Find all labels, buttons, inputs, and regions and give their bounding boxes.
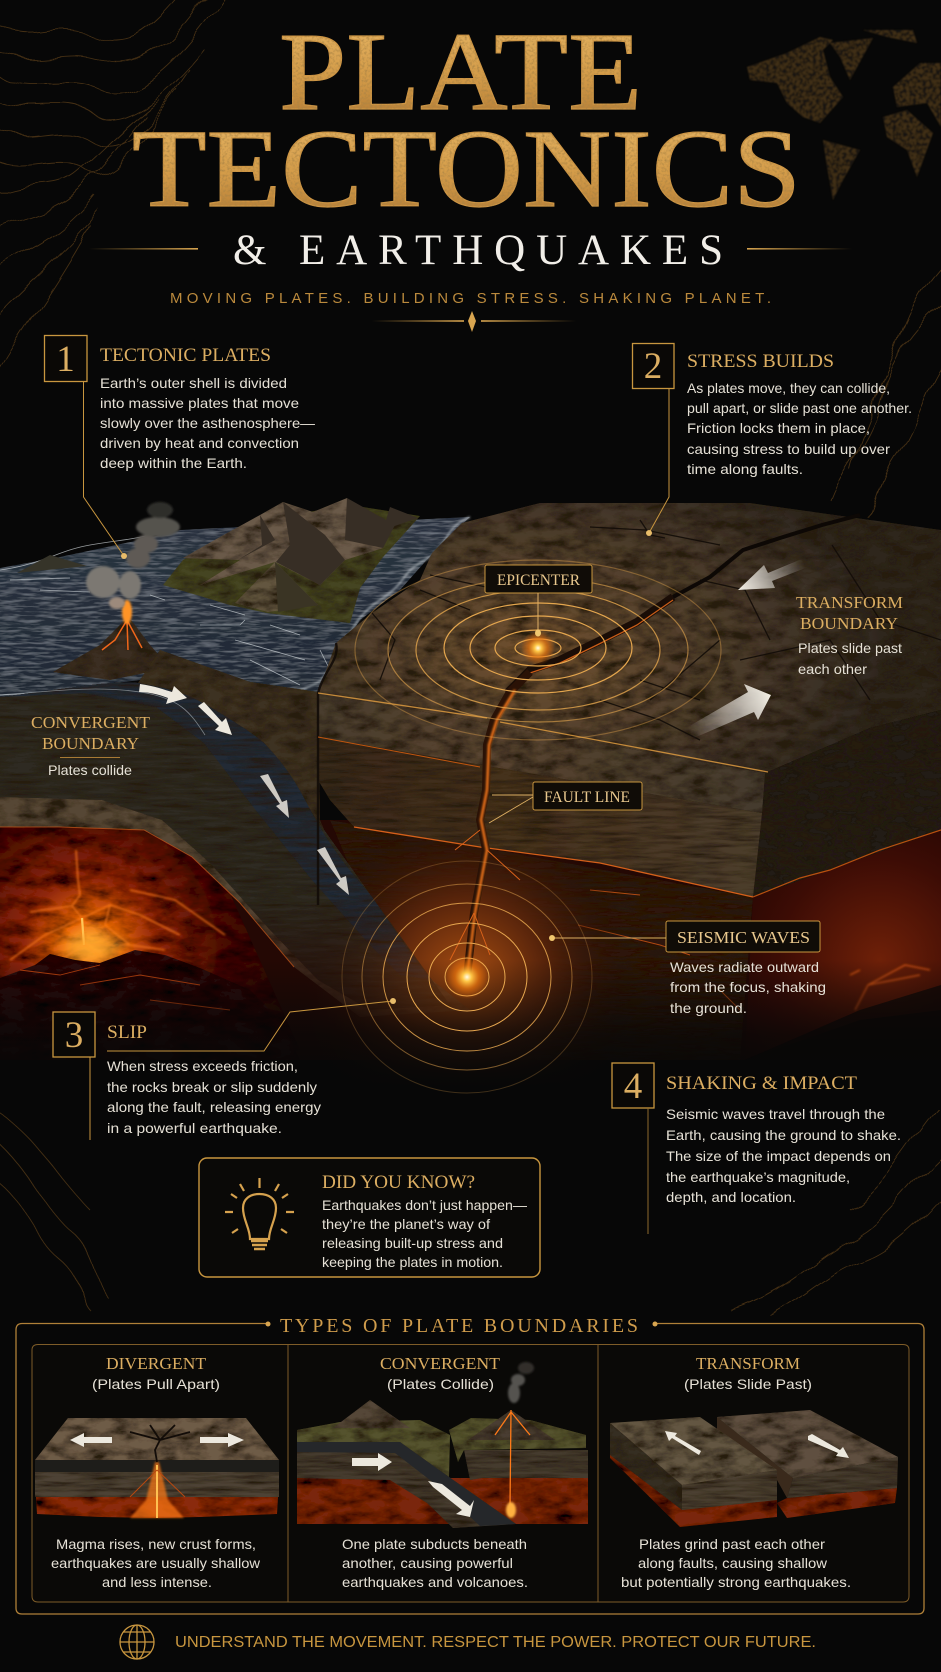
heading: TECTONIC PLATES [100,345,271,366]
heading: SHAKING & IMPACT [666,1073,857,1094]
mountains island [17,498,420,623]
subducting plate [0,682,470,1017]
description: earthquakes and volcanoes. [342,1574,528,1590]
body text [100,375,315,471]
arrows [70,1433,112,1447]
section heading: TYPES OF PLATE BOUNDARIES [280,1315,638,1337]
background contour lines [0,0,941,1315]
glow around focus [290,800,650,1100]
description: another, causing powerful [342,1555,513,1571]
block top surface [318,503,941,773]
epicenter seismic rings [355,560,721,740]
body text: Seismic waves travel through the [666,1106,885,1122]
description [342,1536,528,1590]
text: seismic waves description: from the focus, shaking [670,979,826,995]
panel: step 2 stress builds [632,344,912,536]
rock wedge [138,650,372,897]
body text: depth, and location. [666,1189,796,1205]
text: seismic waves description [670,959,826,1016]
callout: did you know [199,1158,540,1277]
body text: Friction locks them in place, [687,420,870,436]
number box 2: 2 [644,346,662,387]
diagram: divergent block [35,1418,279,1518]
heading: SLIP [107,1022,147,1043]
focus seismic rings [342,861,592,1093]
callout body: Earthquakes don’t just happen— [322,1197,527,1213]
label: transform boundary: BOUNDARY [800,614,898,633]
volcano [53,502,318,705]
label: seismic waves: SEISMIC WAVES [677,928,810,947]
icon: light bulb [225,1178,294,1249]
description: and less intense. [102,1574,212,1590]
subheading: (Plates Pull Apart) [92,1376,220,1392]
volcano smoke [86,502,180,609]
column: divergent [35,1354,279,1590]
hero scene: earth cross-section [0,498,941,1110]
callout heading: DID YOU KNOW? [322,1172,475,1193]
panel: step 4 shaking and impact [612,1063,901,1234]
heading: CONVERGENT [380,1354,501,1373]
description [621,1536,851,1590]
lower crust [0,682,470,1017]
heading: STRESS BUILDS [687,351,834,372]
description [51,1536,261,1590]
description: Magma rises, new crust forms, [56,1536,256,1552]
title line: TECTONICS: TECTONICS [132,108,801,231]
arrows [665,1431,701,1455]
label: transform boundary: each other [798,661,867,677]
footer tagline: UNDERSTAND THE MOVEMENT. RESPECT THE POWER. PROTECT OUR FUTURE. [175,1634,816,1651]
mantle [0,800,941,1110]
volcano [468,1410,555,1440]
block front, upper layer [318,693,765,813]
column: transform [610,1354,898,1590]
subheading: (Plates Slide Past) [684,1376,812,1392]
callout body [322,1197,527,1270]
heading: DIVERGENT [106,1354,207,1373]
label: seismic waves [549,921,820,952]
callout body: they’re the planet’s way of [322,1216,490,1232]
panel: step 3 slip [53,998,396,1140]
body text: the rocks break or slip suddenly [107,1079,317,1095]
connector to fault [646,388,669,536]
connector to focus [90,998,396,1140]
body text: pull apart, or slide past one another. [687,400,912,416]
column: convergent [297,1354,588,1590]
diagram: transform blocks [610,1410,898,1527]
body text: As plates move, they can collide, [687,380,890,396]
number box 4 [612,1063,654,1108]
body text: the earthquake’s magnitude, [666,1169,850,1185]
dark rock mound [0,950,300,1060]
body text: into massive plates that move [100,395,299,411]
label: epicenter: EPICENTER [497,572,580,589]
body text: slowly over the asthenosphere— [100,415,315,431]
dark layer [0,682,450,1010]
mountain [333,1400,410,1428]
number box 4: 4 [624,1066,642,1107]
label: fault line [489,782,642,823]
body text [107,1058,321,1136]
panel: types of plate boundaries [16,1315,924,1614]
connector to volcano region [84,381,127,559]
world map [747,30,941,200]
panel: step 1 tectonic plates [44,336,315,559]
label: fault line: FAULT LINE [544,789,630,806]
description: Plates grind past each other [639,1536,825,1552]
number box 2 [632,344,674,388]
text: seismic waves description: Waves radiate outward [670,959,819,975]
smoke [508,1362,534,1403]
fault line [450,515,860,977]
block front, lower layer [318,737,762,897]
inner frame [32,1344,909,1602]
number box 3 [53,1012,95,1057]
description: One plate subducts beneath [342,1536,527,1552]
description: earthquakes are usually shallow [51,1555,261,1571]
right mantle [745,830,941,1060]
arrows: transform boundary [686,558,808,738]
block right face [753,710,941,897]
number box 1: 1 [56,339,75,380]
footer [120,1625,816,1659]
arrows [352,1453,392,1471]
body text: deep within the Earth. [100,455,247,471]
subheading: (Plates Collide) [387,1376,494,1392]
label: transform boundary [796,593,903,677]
body text: Earth’s outer shell is divided [100,375,287,391]
tagline: MOVING PLATES. BUILDING STRESS. SHAKING PLANET. [170,290,771,307]
title line: PLATE: PLATE [279,11,642,134]
ocean [0,517,470,697]
label: epicenter [485,565,592,636]
body text [666,1106,901,1205]
label: transform boundary: TRANSFORM [796,593,903,612]
number box 3: 3 [65,1015,83,1056]
shoreline foam [0,517,470,695]
label: convergent boundary: Plates collide [48,762,132,778]
label: convergent boundary [31,713,151,778]
icon: globe [120,1625,154,1659]
heading: TRANSFORM [696,1354,800,1373]
body text: time along faults. [687,461,803,477]
rock below block [330,820,753,1060]
subtitle: & EARTHQUAKES: & EARTHQUAKES [233,227,723,274]
body text: causing stress to build up over [687,441,890,457]
callout body: releasing built-up stress and [322,1235,503,1251]
description: but potentially strong earthquakes. [621,1574,851,1590]
ocean slab [0,682,432,980]
label: transform boundary: Plates slide past [798,640,902,656]
body text: driven by heat and convection [100,435,299,451]
surface cracks [318,520,941,905]
body text: The size of the impact depends on [666,1148,891,1164]
text: seismic waves description: the ground. [670,1000,747,1016]
description: along faults, causing shallow [638,1555,828,1571]
body text: Earth, causing the ground to shake. [666,1127,901,1143]
body text [687,380,912,477]
callout body: keeping the plates in motion. [322,1254,503,1270]
body text: in a powerful earthquake. [107,1120,282,1136]
body text: When stress exceeds friction, [107,1058,298,1074]
label: convergent boundary: CONVERGENT [31,713,151,732]
number box 1 [44,336,87,382]
diagram: subduction [297,1362,588,1528]
body text: along the fault, releasing energy [107,1099,321,1115]
title [89,11,852,332]
label: convergent boundary: BOUNDARY [42,734,139,753]
arrows: subducting plate [139,684,349,895]
lava cracks, left [10,850,225,960]
